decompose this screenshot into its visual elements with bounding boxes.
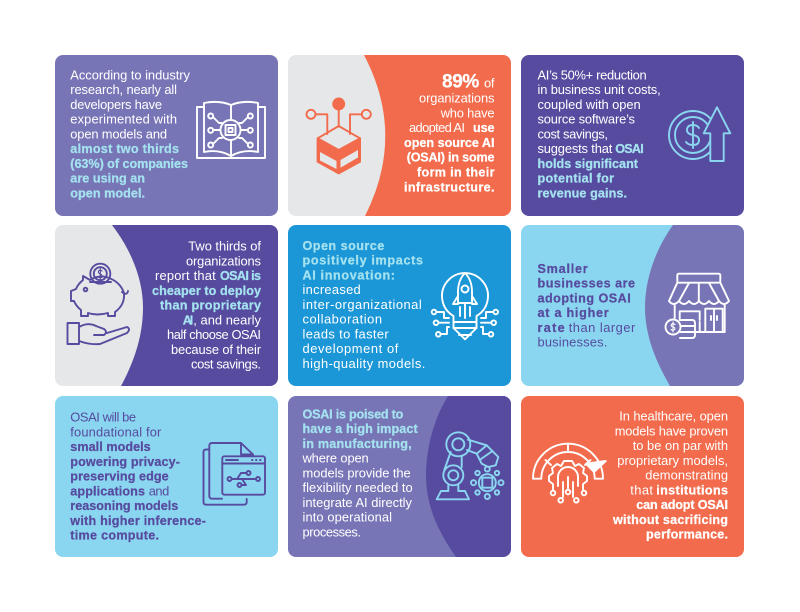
text block: OSAI	[615, 142, 644, 156]
text block: (OSAI) in some	[407, 151, 494, 165]
text block: positively impacts	[302, 254, 423, 268]
text block: rate	[538, 321, 565, 335]
text block: proprietary models,	[617, 453, 728, 468]
purple curved area	[645, 225, 744, 386]
panel: manufacturing	[288, 396, 511, 557]
panel: business unit costs	[521, 55, 744, 216]
text block: cost savings,	[538, 126, 608, 142]
text block: source software’s	[538, 112, 635, 127]
text block: to be on par with	[633, 438, 728, 453]
text block: almost two thirds	[70, 142, 179, 156]
text block: businesses are	[538, 277, 635, 291]
text block: powering privacy-	[70, 455, 180, 469]
text block	[69, 410, 206, 543]
text block: demonstrating	[645, 468, 728, 483]
icon: connected box	[306, 98, 371, 173]
text block: potential for	[538, 172, 614, 186]
text block: leads to faster	[302, 326, 389, 342]
text block	[404, 72, 495, 194]
text block: into operational	[302, 510, 392, 524]
text block: AI innovation:	[302, 268, 395, 282]
text block: 89%	[442, 72, 479, 92]
panel: small models	[55, 396, 278, 557]
icon: coin with up arrow	[669, 107, 730, 161]
text block: Two thirds of	[188, 239, 261, 254]
card background	[55, 225, 278, 386]
text block: open models and	[70, 126, 167, 142]
text block: OSAI is	[220, 269, 261, 283]
text block: AI’s 50%+ reduction	[538, 68, 647, 82]
icon: piggy bank on hand	[68, 264, 129, 344]
purple curved area	[112, 225, 278, 386]
text block: half choose OSAI	[167, 327, 261, 342]
text block: OSAI is poised to	[302, 407, 404, 421]
text block: coupled with open	[538, 97, 641, 112]
text block: infrastructure.	[404, 180, 494, 194]
text block	[70, 68, 191, 200]
card background	[521, 55, 744, 216]
text block: , and nearly	[193, 312, 262, 328]
text block: adopting OSAI	[538, 292, 631, 306]
text block: time compute.	[70, 529, 159, 543]
panel: cheaper to deploy	[55, 225, 278, 386]
panel: 89% of organizations	[288, 55, 511, 216]
text block: of	[484, 76, 495, 90]
panel: AI innovation	[288, 225, 511, 386]
panel: industry research	[55, 55, 278, 216]
text block: where open	[302, 450, 369, 466]
text block	[152, 239, 262, 372]
text block: cheaper to deploy	[152, 284, 261, 298]
text block: development of	[302, 341, 399, 356]
text block: flexibility needed to	[302, 480, 413, 495]
text block: organizations	[186, 254, 261, 268]
icon: robot arm with chip	[437, 432, 504, 499]
text block: Smaller	[538, 262, 588, 276]
text block: holds significant	[538, 157, 639, 171]
text block: foundational for	[70, 424, 162, 440]
icon: book with chip	[197, 102, 265, 158]
text block: adopted AI	[409, 120, 465, 135]
text block: organizations	[419, 91, 494, 106]
text block: open model.	[70, 186, 145, 200]
card background	[55, 55, 278, 216]
card background	[521, 225, 744, 386]
text block: In healthcare, open	[619, 409, 728, 424]
text block: OSAI will be	[70, 410, 136, 425]
text block: revenue gains.	[538, 186, 627, 200]
text block: performance.	[646, 528, 728, 542]
card background	[521, 396, 744, 557]
icon: storefront with coins	[666, 274, 729, 338]
text block: in manufacturing,	[302, 437, 412, 451]
text block: integrate AI directly	[302, 495, 413, 510]
text block: applications	[70, 484, 145, 498]
text block: and	[149, 484, 169, 498]
text block	[612, 409, 728, 542]
text block: processes.	[302, 524, 361, 539]
text block: developers have	[70, 97, 162, 112]
text block: According to industry	[70, 68, 191, 82]
text block: cost savings.	[191, 357, 261, 372]
panel: healthcare	[521, 396, 744, 557]
text block: with higher inference-	[69, 514, 206, 528]
text block: experimented with	[70, 112, 177, 127]
dark curved area	[426, 396, 511, 557]
text block: Open source	[302, 239, 384, 253]
text block: increased	[302, 282, 361, 297]
card background	[288, 396, 511, 557]
text block: can adopt OSAI	[636, 498, 728, 512]
text block: institutions	[656, 484, 728, 498]
text block: high-quality models.	[302, 356, 425, 371]
text block	[538, 68, 661, 200]
icon: gauge with gear	[533, 444, 606, 503]
text block: AI	[183, 314, 193, 328]
orange curved area	[364, 55, 511, 216]
text block: that	[630, 482, 653, 498]
text block: because of their	[171, 342, 262, 357]
text block	[302, 407, 418, 539]
text block: without sacrificing	[612, 513, 728, 527]
text block: models provide the	[302, 465, 411, 480]
icon: rocket in light bulb	[432, 273, 498, 339]
text block: than larger	[569, 320, 636, 335]
text block: have a high impact	[302, 422, 418, 436]
text block: businesses.	[538, 335, 607, 350]
text block: inter-organizational	[302, 297, 422, 312]
card background	[288, 225, 511, 386]
text block: form in their	[417, 166, 495, 180]
text block	[538, 262, 636, 350]
text block: at a higher	[538, 306, 609, 320]
text block: who have	[440, 106, 494, 120]
text block: than proprietary	[160, 299, 261, 313]
text block: reasoning models	[70, 499, 178, 513]
text block: open source AI	[404, 136, 494, 150]
text block: preserving edge	[70, 470, 169, 484]
icon: documents and browser window	[204, 443, 265, 505]
text block: models have proven	[615, 424, 728, 438]
text block	[302, 239, 425, 371]
text block: use	[473, 121, 494, 135]
text block: suggests that	[538, 141, 613, 156]
text block: collaboration	[302, 312, 382, 327]
text block: (63%) of companies	[70, 157, 188, 171]
text block: research, nearly all	[70, 82, 177, 97]
text block: report that	[155, 268, 216, 283]
text block: small models	[70, 440, 151, 454]
text block: are using an	[70, 172, 145, 186]
panel: smaller businesses	[521, 225, 744, 386]
card background	[288, 55, 511, 216]
text block: in business unit costs,	[538, 82, 661, 97]
card background	[55, 396, 278, 557]
